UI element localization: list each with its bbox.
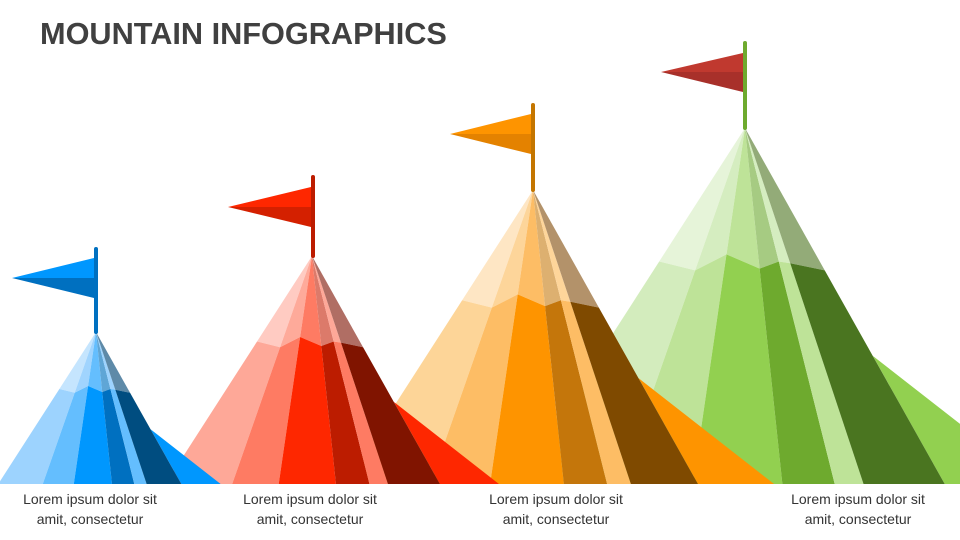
mountain: red (165, 256, 499, 484)
caption 2: Lorem ipsum dolor sit (243, 491, 377, 507)
mountain: orange (344, 190, 774, 484)
caption 2 (243, 491, 377, 527)
flag: green (661, 41, 747, 130)
flag: blue (12, 247, 98, 334)
caption 4 (791, 491, 925, 527)
caption 4: amit, consectetur (805, 511, 911, 527)
caption 1: amit, consectetur (37, 511, 143, 527)
mountain: green (516, 128, 960, 484)
title: MOUNTAIN INFOGRAPHICS (40, 16, 447, 51)
caption 3: amit, consectetur (503, 511, 609, 527)
caption 1: Lorem ipsum dolor sit (23, 491, 157, 507)
caption 3: Lorem ipsum dolor sit (489, 491, 623, 507)
mountain: blue (0, 332, 221, 484)
caption 3 (489, 491, 623, 527)
flag: orange (450, 103, 535, 192)
caption 1 (23, 491, 157, 527)
flag: red (228, 175, 315, 258)
caption 2: amit, consectetur (257, 511, 363, 527)
caption 4: Lorem ipsum dolor sit (791, 491, 925, 507)
